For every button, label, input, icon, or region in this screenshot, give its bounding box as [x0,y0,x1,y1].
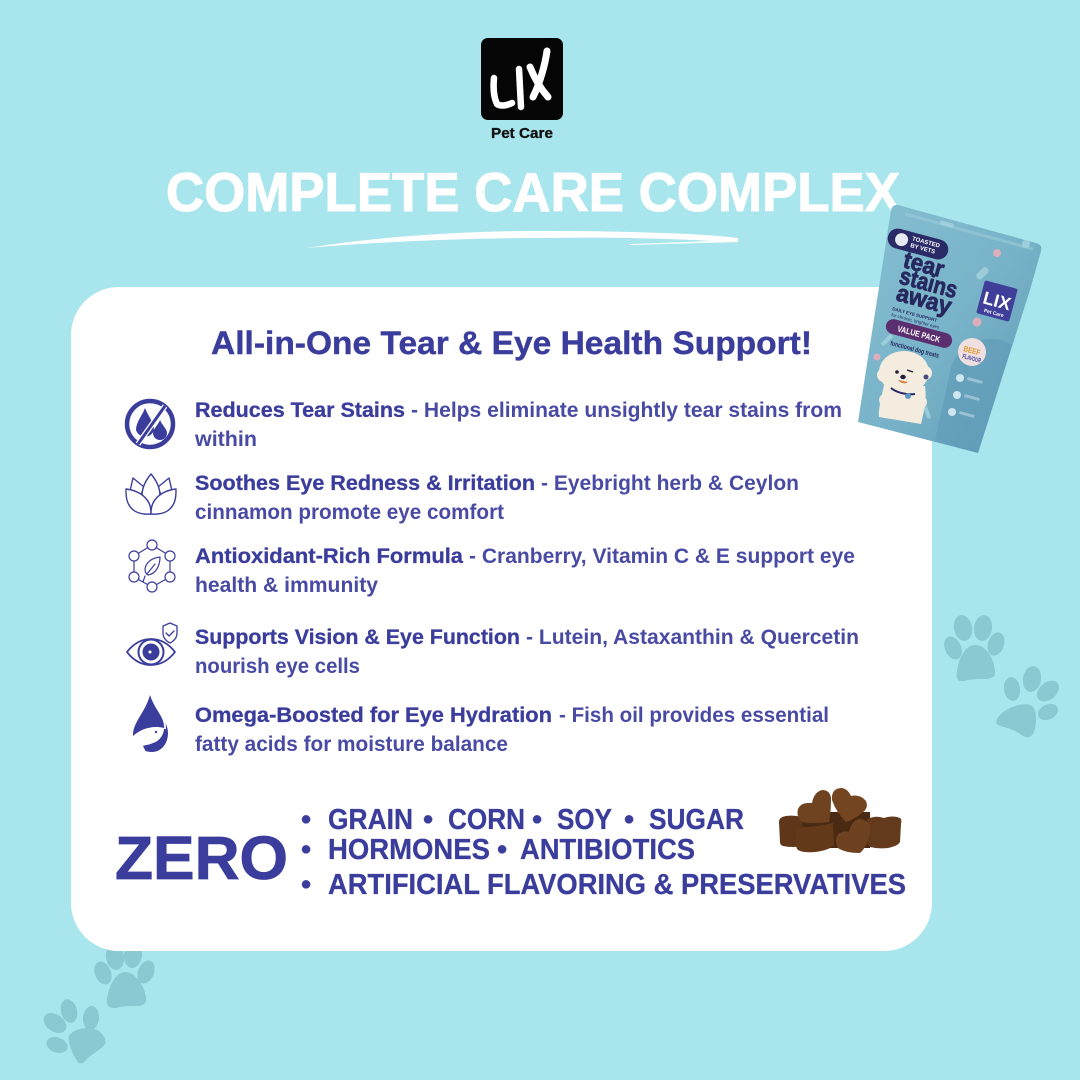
zero heading: ZERO [115,824,288,892]
item: soothes redness: - Eyebright herb & Ceylon [541,472,799,495]
icon: lotus [126,474,176,514]
panel: white card [71,287,932,951]
zero list: • [624,804,634,836]
zero list: ANTIBIOTICS [520,834,695,866]
value pack tag: VALUE PACK [896,323,942,345]
image: product pouch: BEEF [962,344,981,357]
icon: eye with shield [127,623,177,665]
zero list [301,804,906,901]
item: supports vision: Supports Vision & Eye Function [195,625,520,649]
paw print: bottom lower [40,997,106,1064]
dog [877,351,932,424]
item: soothes redness: cinnamon promote eye comfort [195,501,504,524]
paw print: right lower [996,665,1063,737]
brand tag [885,226,951,262]
value pack tag [884,317,954,350]
item: supports vision: - Lutein, Astaxanthin & Quercetin [526,626,859,649]
paw print: right upper [941,613,1007,681]
pouch pattern [881,220,1030,419]
item: reduces tear stains: Reduces Tear Stains [195,398,405,422]
zero list: SUGAR [649,804,744,836]
item: antioxidant formula [195,544,855,597]
icon: no tear drops [127,401,173,447]
pink hearts [874,249,1001,360]
title: COMPLETE CARE COMPLEX [166,161,900,223]
icon: fish oil drop [131,694,168,752]
brand tag: TOASTED [911,236,941,250]
item: antioxidant formula: health & immunity [195,574,378,597]
pouch logo: Pet Care [983,308,1004,319]
product name: stains [896,263,960,304]
zero list: • [423,804,433,836]
zero list: ARTIFICIAL FLAVORING & PRESERVATIVES [328,869,906,901]
item: soothes redness: Soothes Eye Redness & Irritation [195,471,535,495]
product name [893,247,960,320]
item: omega boosted: - Fish oil provides essential [559,704,829,727]
zero list: CORN [448,804,525,836]
product name: away [893,280,955,320]
item: omega boosted: Omega-Boosted for Eye Hydration [195,703,552,727]
zero list: • [497,834,507,866]
item: reduces tear stains: - Helps eliminate unsightly tear stains from [411,399,842,422]
item: omega boosted: fatty acids for moisture balance [195,733,508,756]
title underline swoosh [307,231,738,248]
item: supports vision: nourish eye cells [195,655,360,678]
image: product pouch [858,205,1041,453]
item: soothes redness [195,471,799,524]
image: product pouch: FLAVOUR [961,353,982,365]
icon: molecule leaf [129,540,175,592]
pouch logo [976,280,1018,322]
zero list: HORMONES [328,834,490,866]
benefit badges [948,374,983,418]
image: product pouch: for chronic, brighter eyes [891,312,941,330]
item: reduces tear stains: within [194,428,257,451]
heading: All-in-One Tear & Eye Health Support! [211,325,812,361]
support copy: DAILY EYE SUPPORT [892,306,938,323]
zero list: • [301,804,311,836]
zero list: • [301,834,311,866]
item: supports vision [195,625,859,678]
brand tag: BY VETS [909,243,936,256]
item: antioxidant formula: Antioxidant-Rich Formula [195,544,464,568]
image: heart treats [779,788,901,853]
paw print: bottom upper [91,941,158,1008]
zero list: GRAIN [328,804,413,836]
item: antioxidant formula: - Cranberry, Vitamin C & E support eye [469,545,855,568]
flavour badge [958,338,986,366]
treats copy: functional dog treats [889,340,940,360]
logo: LIX Pet Care [481,38,563,142]
item: reduces tear stains [194,398,842,451]
zero list: SOY [557,804,612,836]
product name: tear [900,247,947,283]
logo: LIX Pet Care: Pet Care [491,126,553,142]
zero list: • [532,804,542,836]
zero list: • [301,869,311,901]
pouch logo: LIX [981,288,1013,314]
item: omega boosted [195,703,829,756]
